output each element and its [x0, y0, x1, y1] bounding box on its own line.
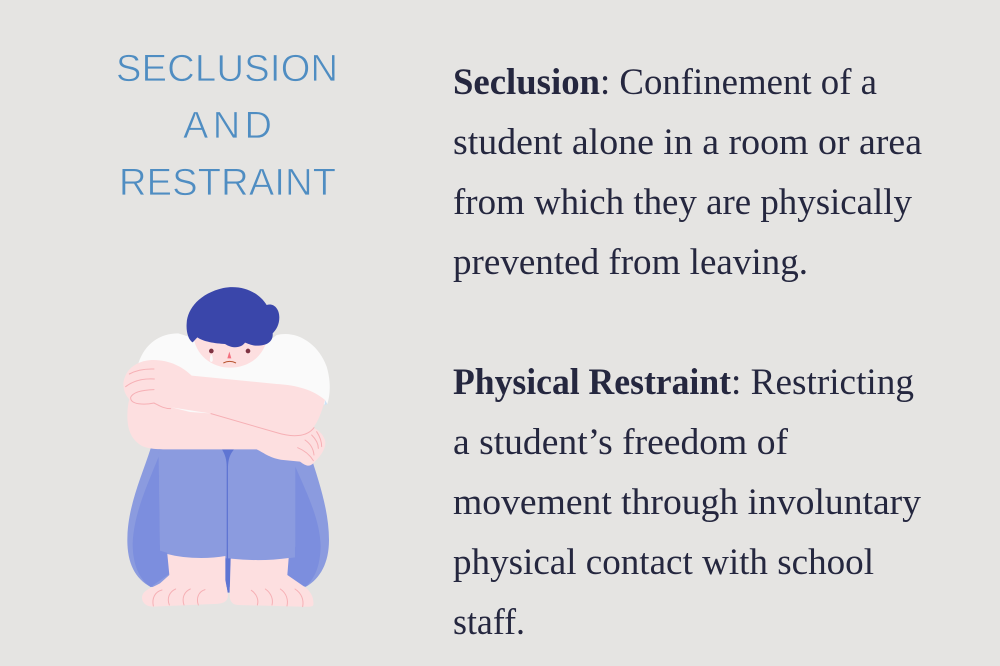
definition: physical restraint	[453, 362, 922, 643]
definition: seclusion: from which they are physically	[453, 182, 912, 223]
title: SECLUSION	[116, 48, 338, 90]
definition: physical restraint: movement through involuntary	[453, 482, 922, 523]
definition: physical restraint: physical contact with school	[453, 542, 874, 583]
definition: seclusion: : Confinement of a	[600, 62, 877, 103]
definition: seclusion: student alone in a room or area	[453, 122, 922, 163]
face	[193, 335, 267, 368]
title: AND	[183, 105, 272, 147]
title: RESTRAINT	[119, 162, 336, 204]
definition: physical restraint: : Restricting	[731, 362, 914, 403]
illustration: sad student hugging knees	[123, 287, 330, 607]
hair	[187, 287, 279, 347]
feet	[142, 554, 313, 607]
definition: physical restraint: a student’s freedom of	[453, 422, 789, 463]
definition: physical restraint: staff.	[453, 602, 525, 643]
definition: physical restraint: Physical Restraint	[453, 362, 732, 403]
title	[116, 48, 338, 204]
shirt	[138, 333, 330, 413]
definition: seclusion	[453, 62, 922, 283]
definition: seclusion: prevented from leaving.	[453, 242, 808, 283]
definition: seclusion: Seclusion	[453, 62, 600, 103]
arms	[123, 360, 327, 466]
trousers	[127, 447, 329, 593]
